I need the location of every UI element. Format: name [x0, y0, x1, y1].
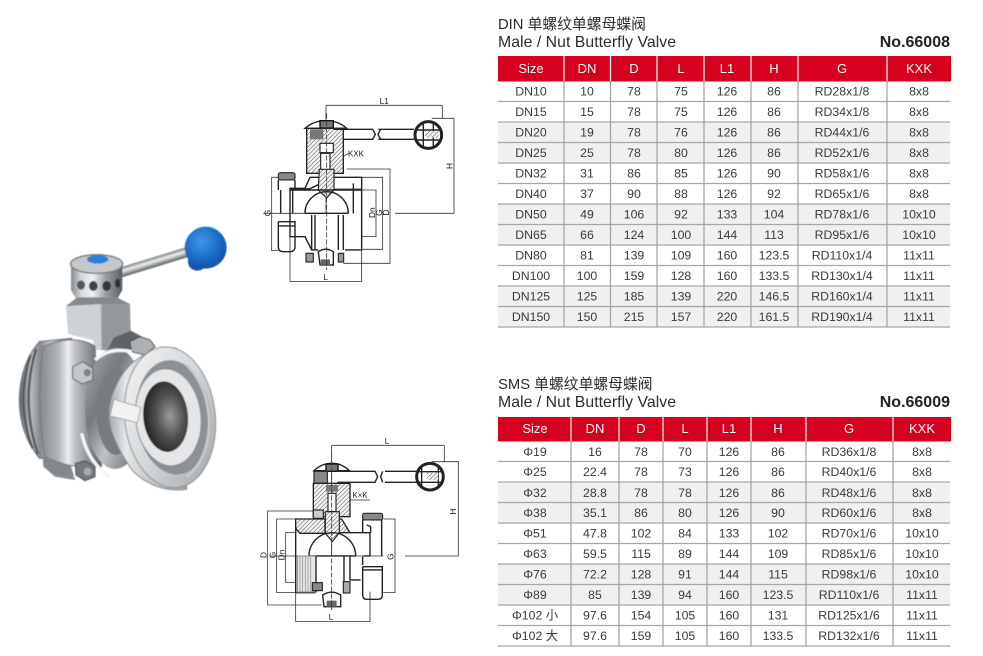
- row Φ102 小: 11x11: [906, 608, 938, 622]
- row DN80: 81: [580, 248, 594, 262]
- row Φ38: 86: [634, 506, 648, 520]
- row Φ32: 78: [634, 486, 648, 500]
- row Φ102 小: 97.6: [583, 608, 607, 622]
- label KXK: KXK: [348, 149, 365, 158]
- table header: L1: [720, 61, 734, 76]
- row DN40: 37: [580, 187, 594, 201]
- product photo: stainless butterfly valve: [19, 227, 227, 492]
- row Φ32: 28.8: [583, 486, 607, 500]
- row DN50: [515, 208, 936, 222]
- heading: DIN series: Male / Nut Butterfly Valve: [498, 34, 676, 51]
- row Φ25: 8x8: [912, 465, 932, 479]
- table header: H: [773, 421, 783, 436]
- row Φ102 小: 154: [631, 608, 651, 622]
- row DN20: 76: [674, 126, 688, 140]
- row Φ102 大: Φ102 大: [512, 629, 558, 643]
- row DN150: 157: [671, 310, 691, 324]
- row Φ63: 115: [631, 547, 651, 561]
- heading: SMS series: No.66009: [880, 394, 950, 411]
- row DN50: 104: [764, 208, 784, 222]
- row Φ89: 94: [678, 588, 692, 602]
- table header: H: [769, 61, 779, 76]
- row Φ102 小: 105: [675, 608, 695, 622]
- row Φ51: 84: [678, 526, 692, 540]
- row DN65: [515, 228, 936, 242]
- table: SMS dimensions: [498, 417, 951, 646]
- row DN25: 8x8: [909, 146, 929, 160]
- heading: DIN series: [498, 16, 950, 51]
- row Φ19: RD36x1/8: [822, 445, 876, 459]
- table header: D: [629, 61, 639, 76]
- row DN20: 19: [580, 126, 594, 140]
- dimension G right: G: [386, 553, 396, 560]
- row Φ19: 86: [771, 445, 785, 459]
- row DN100: 11x11: [903, 269, 935, 283]
- row Φ76: RD98x1/6: [822, 568, 876, 582]
- row Φ63: 144: [719, 547, 739, 561]
- row Φ51: 10x10: [905, 526, 939, 540]
- row DN50: RD78x1/6: [815, 208, 869, 222]
- dimensions D G Dn: Dn: [276, 549, 286, 560]
- row DN20: DN20: [515, 126, 547, 140]
- row DN25: 25: [580, 146, 594, 160]
- row Φ51: Φ51: [523, 526, 547, 540]
- shaded rows: [498, 122, 950, 327]
- dimension L1: [326, 96, 442, 213]
- row Φ32: 86: [771, 486, 785, 500]
- row DN125: 220: [717, 290, 737, 304]
- union nut: [109, 342, 222, 492]
- row DN80: DN80: [515, 248, 547, 262]
- row Φ89: RD110x1/6: [819, 588, 879, 602]
- table header: Size: [522, 421, 548, 436]
- row DN125: 11x11: [903, 290, 935, 304]
- row Φ63: Φ63: [523, 547, 547, 561]
- row Φ102 大: 97.6: [583, 629, 607, 643]
- threaded male end: [19, 338, 72, 459]
- row DN32: DN32: [515, 166, 547, 180]
- handle rod: [119, 244, 198, 277]
- row DN10: DN10: [515, 84, 547, 98]
- row DN32: 86: [627, 166, 641, 180]
- row DN25: 80: [674, 146, 688, 160]
- row Φ76: 10x10: [905, 568, 939, 582]
- row Φ51: 102: [631, 526, 651, 540]
- table header: DN: [578, 61, 596, 76]
- hex neck: [66, 297, 148, 350]
- table header: G: [837, 61, 847, 76]
- row DN40: RD65x1/6: [815, 187, 869, 201]
- row Φ89: [523, 588, 938, 602]
- row DN20: 78: [627, 126, 641, 140]
- row Φ38: Φ38: [523, 506, 547, 520]
- row DN65: 113: [764, 228, 784, 242]
- row DN100: 133.5: [759, 269, 790, 283]
- row Φ102 大: 160: [719, 629, 739, 643]
- row DN32: 90: [767, 166, 781, 180]
- row DN25: [515, 146, 929, 160]
- row DN50: DN50: [515, 208, 547, 222]
- row Φ19: 70: [678, 445, 692, 459]
- row DN40: 92: [767, 187, 781, 201]
- row DN20: 126: [717, 126, 737, 140]
- table header: [498, 56, 951, 82]
- row DN80: 109: [671, 248, 691, 262]
- row DN40: 90: [627, 187, 641, 201]
- row Φ19: [523, 445, 932, 459]
- row DN15: 8x8: [909, 105, 929, 119]
- row DN32: RD58x1/6: [815, 166, 869, 180]
- row DN40: [515, 187, 929, 201]
- row Φ38: 35.1: [583, 506, 607, 520]
- row DN50: 133: [717, 208, 737, 222]
- row Φ19: 16: [588, 445, 602, 459]
- ball knob section: [415, 122, 442, 148]
- row DN25: 78: [627, 146, 641, 160]
- row DN150: [512, 310, 935, 324]
- row Φ51: 133: [719, 526, 739, 540]
- row Φ102 大: 133.5: [763, 629, 794, 643]
- row DN125: [512, 290, 935, 304]
- row Φ25: RD40x1/6: [822, 465, 876, 479]
- row DN80: 139: [624, 248, 644, 262]
- dimension H: [405, 462, 458, 556]
- row Φ51: [523, 526, 939, 540]
- row Φ32: RD48x1/6: [822, 486, 876, 500]
- row Φ89: Φ89: [523, 588, 547, 602]
- row DN20: [515, 126, 929, 140]
- dimension G right: [383, 519, 396, 593]
- row Φ102 小: [512, 608, 938, 622]
- row Φ102 大: RD132x1/6: [818, 629, 880, 643]
- row Φ102 大: [512, 629, 938, 643]
- row Φ76: Φ76: [523, 568, 547, 582]
- dimension L: L: [323, 272, 328, 282]
- row DN20: RD44x1/6: [815, 126, 869, 140]
- row Φ76: [523, 568, 939, 582]
- row DN32: [515, 166, 929, 180]
- dimensions D G Dn: Dn: [367, 207, 377, 218]
- dimension H: H: [445, 163, 455, 169]
- row DN10: RD28x1/8: [815, 84, 869, 98]
- row Φ51: 102: [768, 526, 788, 540]
- row DN15: 78: [627, 105, 641, 119]
- row Φ32: Φ32: [523, 486, 547, 500]
- row Φ38: 8x8: [912, 506, 932, 520]
- row Φ63: RD85x1/6: [822, 547, 876, 561]
- row DN50: 49: [580, 208, 594, 222]
- label KXK: [345, 491, 370, 500]
- row DN15: 75: [674, 105, 688, 119]
- row Φ102 大: 11x11: [906, 629, 938, 643]
- row DN40: 8x8: [909, 187, 929, 201]
- row Φ89: 160: [719, 588, 739, 602]
- row DN100: [512, 269, 935, 283]
- row DN15: RD34x1/8: [815, 105, 869, 119]
- dimension L: [290, 190, 362, 282]
- row Φ76: 144: [719, 568, 739, 582]
- row Φ102 小: 160: [719, 608, 739, 622]
- row Φ19: 78: [634, 445, 648, 459]
- dimension L1: L1: [380, 96, 389, 106]
- table header: DN: [586, 421, 604, 436]
- bolt back: [130, 337, 155, 355]
- row Φ19: 126: [719, 445, 739, 459]
- row DN40: 126: [717, 187, 737, 201]
- row DN150: 220: [717, 310, 737, 324]
- dimensions D G Dn: D: [259, 552, 269, 558]
- row DN10: 78: [627, 84, 641, 98]
- row Φ102 大: 105: [675, 629, 695, 643]
- table header: L1: [722, 421, 736, 436]
- row DN50: 106: [624, 208, 644, 222]
- bolt lower: [75, 461, 95, 481]
- ball knob section: [417, 463, 443, 490]
- heading: DIN series: No.66008: [880, 34, 950, 51]
- row Φ38: 90: [771, 506, 785, 520]
- row DN100: RD130x1/4: [811, 269, 873, 283]
- row DN65: DN65: [515, 228, 547, 242]
- shaded rows: [498, 482, 950, 605]
- row DN10: 126: [717, 84, 737, 98]
- row DN32: 31: [580, 166, 594, 180]
- row DN15: 126: [717, 105, 737, 119]
- row DN10: 8x8: [909, 84, 929, 98]
- row Φ102 小: 131: [768, 608, 788, 622]
- row Φ25: 126: [719, 465, 739, 479]
- row DN15: 15: [580, 105, 594, 119]
- row Φ102 小: Φ102 小: [512, 608, 558, 622]
- row DN125: 139: [671, 290, 691, 304]
- schematic: DIN valve section drawing: [263, 96, 455, 282]
- row DN100: 100: [577, 269, 597, 283]
- table header: G: [844, 421, 854, 436]
- row DN25: DN25: [515, 146, 547, 160]
- row DN80: 160: [717, 248, 737, 262]
- row DN125: 125: [577, 290, 597, 304]
- table header: L: [681, 421, 689, 436]
- row Φ63: 59.5: [583, 547, 607, 561]
- row Φ25: 22.4: [583, 465, 607, 479]
- handle and body section: [278, 113, 414, 270]
- row DN65: 100: [671, 228, 691, 242]
- table header: KXK: [906, 61, 932, 76]
- row DN125: RD160x1/4: [811, 290, 873, 304]
- dimensions G left: G: [263, 210, 273, 216]
- table header: Size: [518, 61, 544, 76]
- row DN10: 75: [674, 84, 688, 98]
- row DN150: RD190x1/4: [811, 310, 873, 324]
- row DN125: DN125: [512, 290, 550, 304]
- row Φ25: [523, 465, 932, 479]
- row DN25: 86: [767, 146, 781, 160]
- row DN150: 150: [577, 310, 597, 324]
- row DN40: DN40: [515, 187, 547, 201]
- row Φ19: Φ19: [523, 445, 547, 459]
- row DN125: 146.5: [759, 290, 790, 304]
- blue ball knob: [185, 227, 227, 271]
- row Φ25: 78: [634, 465, 648, 479]
- row Φ89: 11x11: [906, 588, 938, 602]
- row Φ32: [523, 486, 932, 500]
- row Φ32: 8x8: [912, 486, 932, 500]
- row DN125: 185: [624, 290, 644, 304]
- heading: SMS series: Male / Nut Butterfly Valve: [498, 394, 676, 411]
- dimension L top: [332, 436, 444, 556]
- row DN32: 126: [717, 166, 737, 180]
- row Φ89: 123.5: [763, 588, 794, 602]
- row DN100: 160: [717, 269, 737, 283]
- dimension H: H: [448, 509, 458, 515]
- bolt upper: [73, 362, 93, 384]
- row DN150: 11x11: [903, 310, 935, 324]
- row DN15: DN15: [515, 105, 547, 119]
- row Φ63: [523, 547, 939, 561]
- row Φ32: 78: [678, 486, 692, 500]
- row Φ102 小: RD125x1/6: [818, 608, 880, 622]
- dimensions D G Dn: G: [374, 209, 384, 216]
- lower bump: [43, 457, 75, 480]
- dimensions D G Dn: [343, 169, 391, 263]
- bore: [140, 380, 191, 454]
- table header: KXK: [909, 421, 935, 436]
- heading: DIN series: DIN 单螺纹单螺母蝶阀: [498, 16, 646, 33]
- row DN65: 124: [624, 228, 644, 242]
- heading: SMS series: [498, 376, 950, 411]
- row DN25: 126: [717, 146, 737, 160]
- row DN50: 10x10: [902, 208, 936, 222]
- row DN50: 92: [674, 208, 688, 222]
- row DN80: 123.5: [759, 248, 790, 262]
- row Φ102 大: 159: [631, 629, 651, 643]
- dimension L top: L: [385, 436, 390, 446]
- row Φ25: Φ25: [523, 465, 547, 479]
- row DN32: 8x8: [909, 166, 929, 180]
- row Φ38: RD60x1/6: [822, 506, 876, 520]
- row Φ38: 80: [678, 506, 692, 520]
- row DN100: 159: [624, 269, 644, 283]
- row Φ19: 8x8: [912, 445, 932, 459]
- row DN100: 128: [671, 269, 691, 283]
- flange collar: [40, 340, 102, 467]
- row DN80: 11x11: [903, 248, 935, 262]
- row Φ51: 47.8: [583, 526, 607, 540]
- dimensions G left: [263, 177, 307, 251]
- label KXK: K×K: [352, 491, 368, 500]
- table: DIN dimensions: [498, 56, 951, 327]
- table header: D: [636, 421, 646, 436]
- row DN25: RD52x1/6: [815, 146, 869, 160]
- row Φ25: 86: [771, 465, 785, 479]
- heading: SMS series: SMS 单螺纹单螺母蝶阀: [498, 376, 653, 393]
- row DN40: 88: [674, 187, 688, 201]
- row DN80: RD110x1/4: [812, 248, 872, 262]
- row Φ76: 91: [678, 568, 692, 582]
- row DN10: 86: [767, 84, 781, 98]
- dimension H: [395, 118, 455, 213]
- table header: L: [677, 61, 685, 76]
- dimensions D G Dn: D: [381, 210, 391, 216]
- row DN150: 215: [624, 310, 644, 324]
- row DN10: [515, 84, 929, 98]
- middle disc: [82, 348, 145, 477]
- schematic: SMS valve section drawing: [259, 436, 458, 622]
- row Φ38: [523, 506, 932, 520]
- row DN32: 85: [674, 166, 688, 180]
- row Φ25: 73: [678, 465, 692, 479]
- row Φ76: 72.2: [583, 568, 607, 582]
- row DN15: [515, 105, 929, 119]
- label KXK: [341, 149, 365, 158]
- row Φ89: 139: [631, 588, 651, 602]
- row Φ89: 85: [588, 588, 602, 602]
- row DN20: 86: [767, 126, 781, 140]
- row Φ76: 115: [768, 568, 788, 582]
- dimensions D G Dn: G: [267, 552, 277, 558]
- row DN150: DN150: [512, 310, 550, 324]
- row DN65: 144: [717, 228, 737, 242]
- row Φ63: 89: [678, 547, 692, 561]
- dimensions D G Dn: [259, 511, 383, 605]
- row DN65: RD95x1/6: [815, 228, 869, 242]
- handle and body section: [296, 453, 417, 610]
- row Φ76: 128: [631, 568, 651, 582]
- row Φ32: 126: [719, 486, 739, 500]
- row DN65: 66: [580, 228, 594, 242]
- table header: [498, 417, 951, 442]
- row DN100: DN100: [512, 269, 550, 283]
- row DN20: 8x8: [909, 126, 929, 140]
- actuator head: [71, 255, 123, 300]
- row Φ63: 109: [768, 547, 788, 561]
- row Φ38: 126: [719, 506, 739, 520]
- row Φ51: RD70x1/6: [822, 526, 876, 540]
- row DN65: 10x10: [902, 228, 936, 242]
- row DN10: 10: [580, 84, 594, 98]
- dimension L bottom: [296, 592, 370, 622]
- row DN80: [515, 248, 935, 262]
- row DN150: 161.5: [759, 310, 790, 324]
- dimension L bottom: L: [329, 612, 334, 622]
- row DN15: 86: [767, 105, 781, 119]
- row Φ63: 10x10: [905, 547, 939, 561]
